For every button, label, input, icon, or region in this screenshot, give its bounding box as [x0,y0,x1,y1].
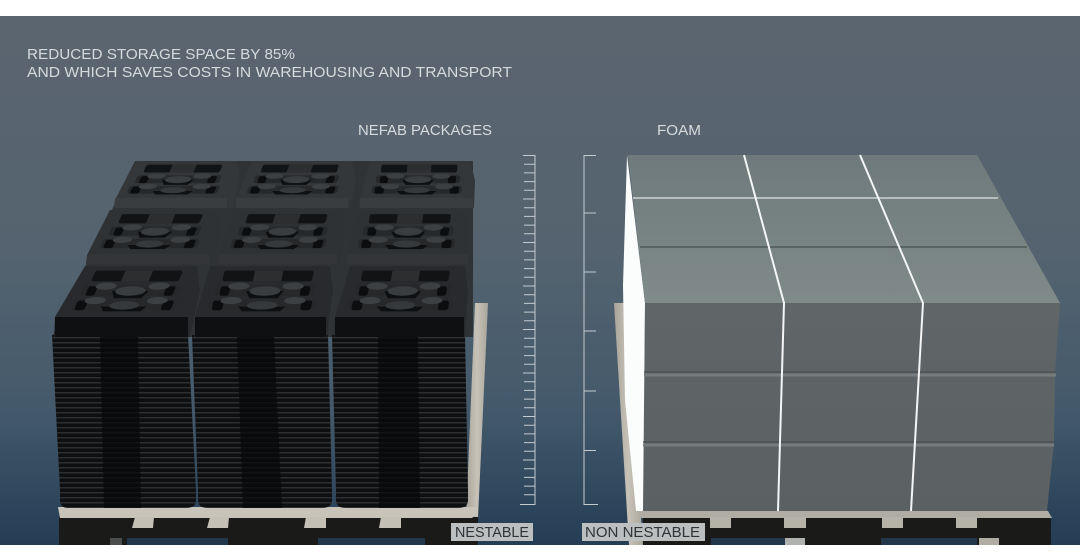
foam: top face [628,155,1060,303]
tray: back row right [359,161,475,208]
heading: REDUCED STORAGE SPACE BY 85% [27,46,295,63]
tray: middle row right [346,210,470,264]
left pallet [58,303,488,545]
heading [27,46,512,81]
tray: back row left [114,161,240,208]
foam: front face [643,303,1060,511]
heading: AND WHICH SAVES COSTS IN WAREHOUSING AND TRANSPORT [27,64,512,81]
right pallet [614,303,1052,545]
tray: middle row left [86,210,222,264]
stacks of Nefab trays [52,161,475,508]
tag: nestable: NESTABLE [455,525,529,541]
tray: front row centre [194,266,333,337]
label: Foam: FOAM [657,123,701,139]
stack column 1 [52,335,196,508]
foam block stack [623,155,1060,511]
scale: foam, coarse ticks [584,155,598,505]
tray: front row left [54,266,200,337]
foam: white side edge [623,155,645,511]
tray: back row centre [235,161,356,208]
scale: Nefab, fine ticks [520,155,535,505]
stack column 3 [332,335,468,508]
tray: middle row centre [217,210,345,264]
tag: non nestable: NON NESTABLE [585,525,700,541]
tray: front row right [334,266,468,337]
label: Nefab packages: NEFAB PACKAGES [358,123,492,139]
stack column 2 [192,335,332,508]
